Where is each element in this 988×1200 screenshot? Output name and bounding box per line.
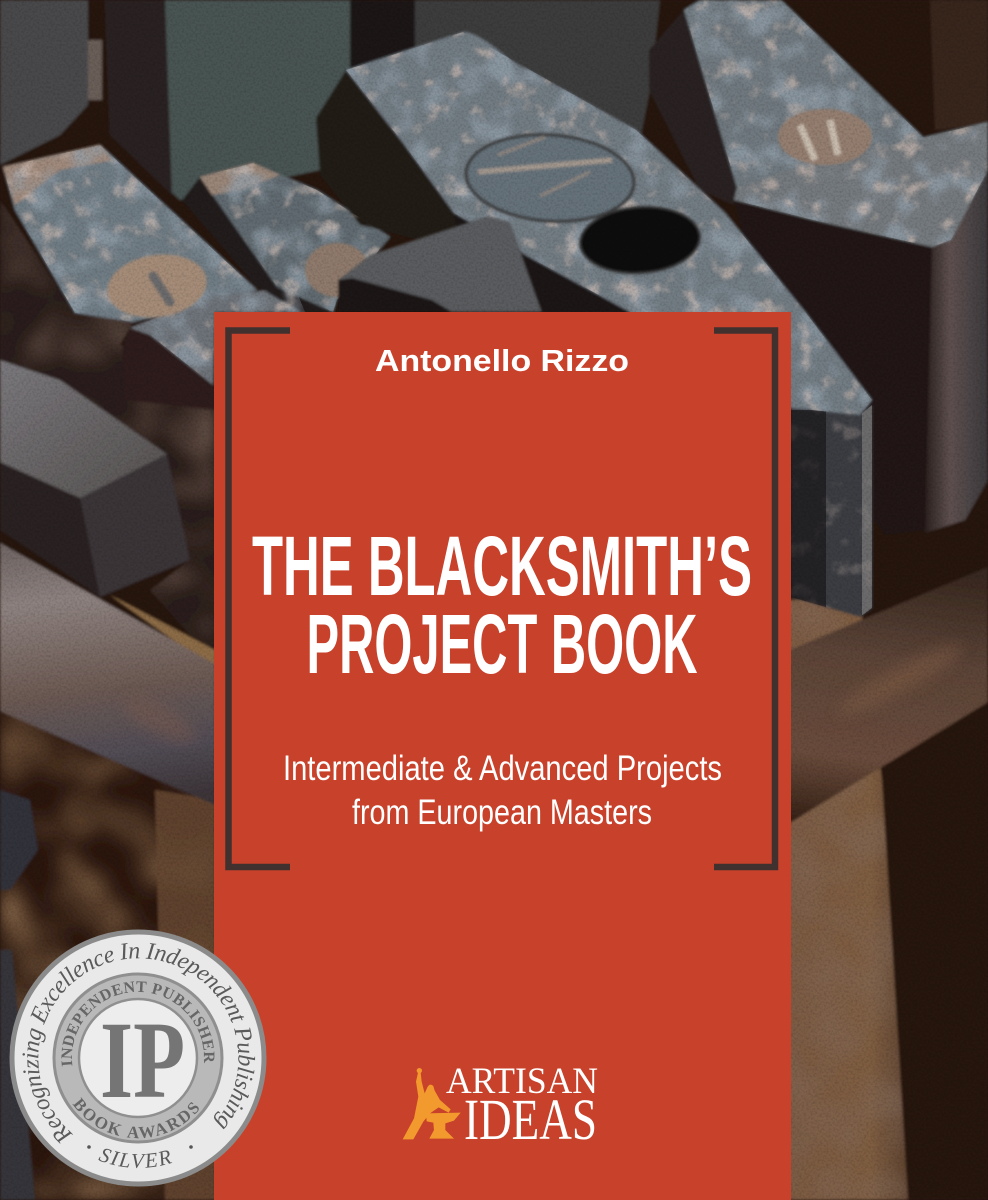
- metal mottling: [0, 0, 988, 420]
- main hammer top surface: [346, 32, 872, 415]
- seal inner text: INDEPENDENT PUBLISHER: [61, 981, 214, 1066]
- handle: right: [785, 567, 988, 826]
- far hammer: top left: [0, 0, 88, 165]
- handle: left: [0, 543, 215, 805]
- seal disc: [12, 932, 264, 1184]
- book title: PROJECT BOOK: [306, 597, 698, 691]
- second small hammer: [182, 177, 333, 312]
- far hammer: top centre: [415, 0, 660, 140]
- right front hammer dark face: [734, 200, 932, 535]
- book title: [252, 519, 752, 691]
- icon: blacksmith at anvil: [403, 1068, 461, 1139]
- back right hammer dark side: [649, 10, 737, 205]
- dark wedge behind block: [0, 200, 215, 650]
- seal centre: [79, 999, 197, 1117]
- front wedge hammer: [338, 216, 542, 312]
- wordmark: [446, 1061, 598, 1152]
- subtitle: [283, 749, 722, 832]
- right front hammer top: [734, 122, 988, 247]
- left block hammer: [0, 462, 100, 597]
- seal band: [54, 974, 222, 1142]
- wordmark: IDEAS: [464, 1087, 597, 1152]
- seal silver: SILVER: [98, 1148, 172, 1168]
- end face rust: [791, 405, 872, 615]
- hammer hole: [578, 203, 702, 277]
- red title panel: [214, 312, 791, 1200]
- seal outer script: Recognizing Excellence In Independent Publishing: [22, 943, 256, 1144]
- publisher logo: [403, 1061, 598, 1152]
- handle highlights: [118, 637, 967, 751]
- far hammer: tall centre left: [105, 0, 350, 200]
- author name: Antonello Rizzo: [375, 343, 629, 378]
- seal book awards: BOOK AWARDS: [72, 1097, 199, 1138]
- wood and dark lower background: [0, 700, 215, 1200]
- seal IP letters: IP: [100, 999, 185, 1121]
- main hammer end face: [791, 405, 872, 617]
- front wedge on left hammer: [130, 288, 305, 385]
- right front hammer side: [925, 170, 988, 533]
- stamp marks: [103, 109, 872, 324]
- left front hammer top face: [3, 145, 257, 322]
- left bracket: [228, 330, 290, 867]
- subtitle: from European Masters: [352, 793, 652, 832]
- back right hammer top: [684, 0, 926, 188]
- main hammer dark left face: [316, 70, 480, 260]
- main hammer underside: [454, 213, 630, 312]
- subtitle: Intermediate & Advanced Projects: [283, 749, 722, 788]
- award seal: [10, 930, 266, 1186]
- right bracket: [714, 330, 775, 867]
- wordmark: ARTISAN: [446, 1061, 598, 1102]
